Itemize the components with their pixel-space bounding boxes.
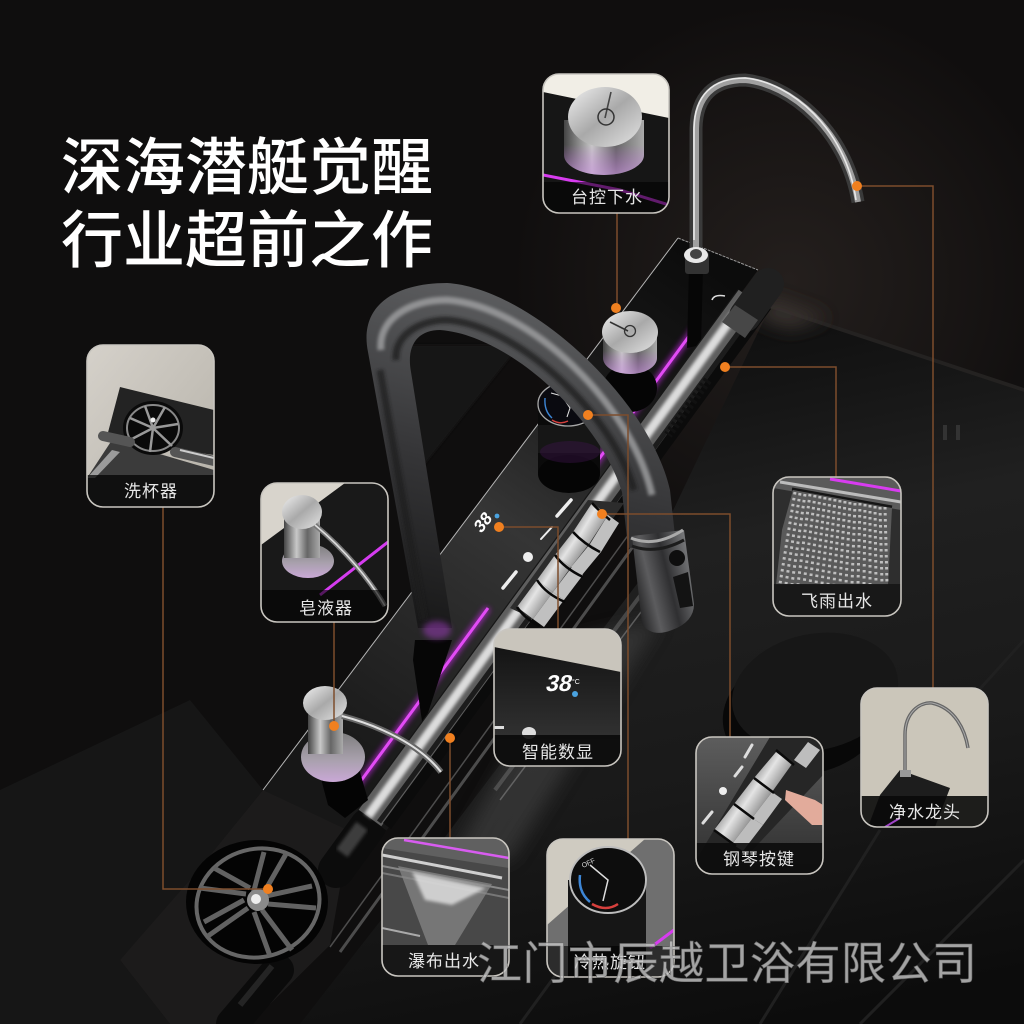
card: drain control: [543, 74, 669, 213]
card: cup washer: 洗杯器: [124, 482, 178, 501]
faucet pull-out head: [631, 530, 694, 633]
connector dots: [263, 181, 862, 894]
main pull-out faucet: [367, 283, 694, 639]
card: drain control: 台控下水: [571, 188, 643, 207]
card: rain spray outlet: 飞雨出水: [801, 592, 873, 611]
bottom connector capsules: [232, 826, 368, 1024]
card: purified water faucet: [861, 688, 988, 827]
title: 深海潜艇觉醒: [61, 134, 433, 203]
card: hot cold knob: 冷热旋钮: [574, 953, 646, 972]
cup washer wheel: [184, 835, 332, 971]
control panel: [263, 238, 758, 830]
reflection strips on panel: [413, 268, 703, 728]
small purifier faucet: [684, 78, 858, 300]
drain knob: [602, 311, 658, 412]
connector lines: [163, 186, 933, 889]
card: soap dispenser: 皂液器: [299, 599, 353, 618]
piano keys: [510, 500, 624, 627]
card: soap dispenser: [261, 483, 388, 622]
card: smart display: 智能数显: [522, 743, 594, 762]
purple light strip: [352, 328, 695, 793]
soap dispenser: [301, 686, 441, 818]
card: piano keys: [696, 737, 823, 874]
card: hot cold knob: [547, 839, 674, 977]
lower deck with cup washer base: [120, 790, 350, 1024]
title: 行业超前之作: [61, 207, 433, 276]
title: [61, 134, 433, 276]
steel rail: [368, 284, 768, 826]
card: smart display: 38: [544, 670, 575, 696]
card: smart display: [494, 629, 621, 766]
secondary rail lines: [330, 498, 663, 952]
card: waterfall outlet: 瀑布出水: [408, 952, 480, 971]
card: hot cold knob: OFF: [581, 858, 597, 870]
card: rain spray outlet: [773, 477, 901, 616]
panel digital display and touch marks: [470, 500, 571, 588]
card: cup washer: [87, 345, 214, 507]
panel digital display and touch marks: 38: [470, 507, 495, 537]
mixer knob: [538, 382, 600, 493]
card: piano keys: 钢琴按键: [723, 850, 795, 869]
watermark: 江门市辰越卫浴有限公司: [477, 938, 978, 989]
drain: [711, 618, 909, 790]
sink basin: [300, 296, 1024, 1024]
card: waterfall outlet: [382, 838, 509, 976]
card: smart display: °C: [572, 678, 580, 686]
card: purified water faucet: 净水龙头: [889, 803, 961, 822]
